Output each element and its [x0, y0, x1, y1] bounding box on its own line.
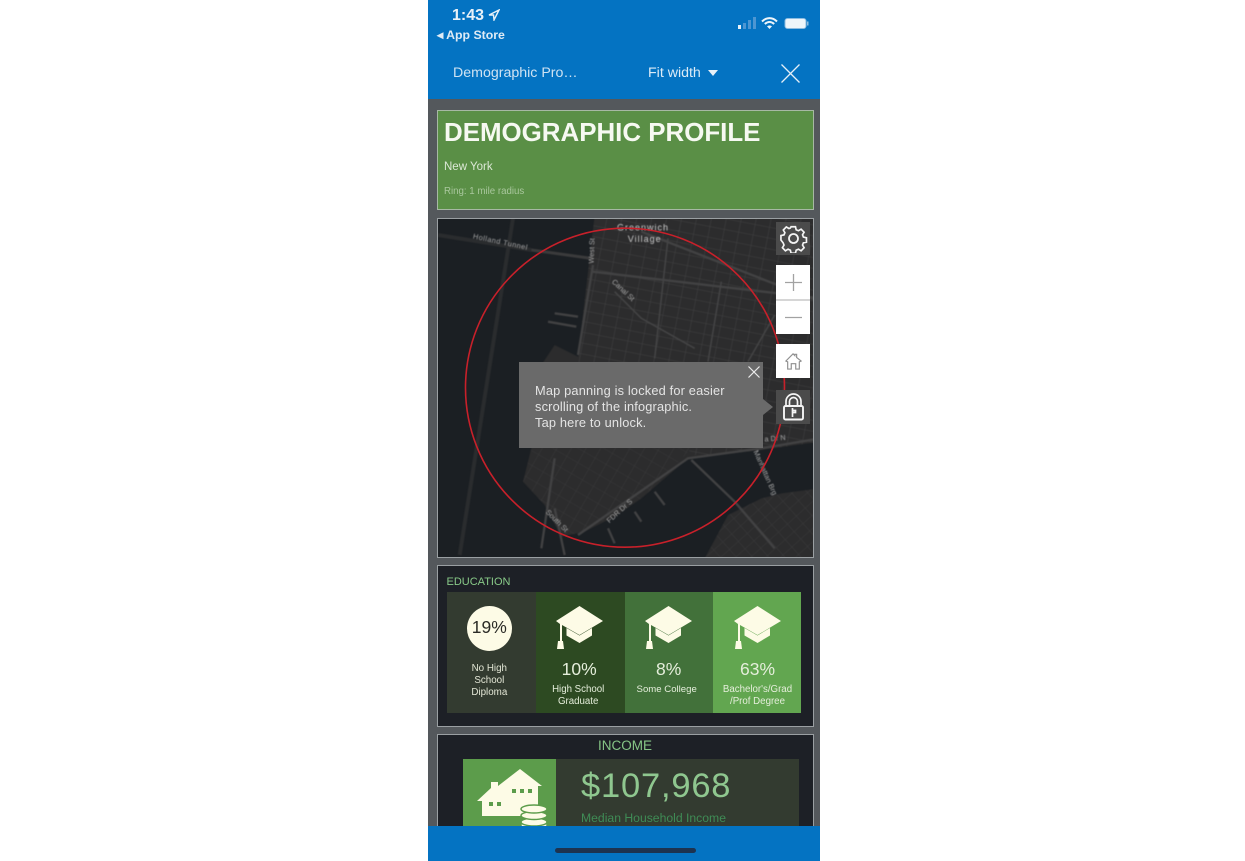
phone screen: [428, 0, 820, 861]
ring: 1 mile radius: [464, 227, 786, 548]
icon: padlock: [783, 393, 804, 420]
icon: plus: [785, 274, 802, 291]
label: Graduate: [558, 696, 598, 707]
back to app store: ◂ App Store: [437, 28, 505, 42]
callout pointer: [763, 399, 773, 415]
icon: graduation cap: [645, 606, 692, 649]
panel: education: [437, 565, 814, 727]
callout text: Tap here to unlock.: [535, 415, 646, 430]
icon: dropdown caret: [708, 70, 718, 76]
education tile: bachelor's: [713, 592, 801, 712]
icon: house and coins: [477, 769, 546, 826]
icon: graduation cap: [734, 606, 781, 649]
callout text: scrolling of the infographic.: [535, 399, 692, 414]
ring radius: Ring: 1 mile radius: [444, 186, 524, 196]
map artwork: Village: [627, 234, 661, 244]
app header bar: [428, 0, 820, 99]
stat: 10%: [562, 658, 597, 678]
panel: title banner: [437, 110, 814, 210]
map artwork: [438, 219, 813, 557]
label: [471, 663, 508, 698]
status time: 1:43: [452, 7, 484, 24]
panel: map: [437, 218, 814, 558]
callout text: Map panning is locked for easier: [535, 383, 725, 398]
label: /Prof Degree: [730, 696, 785, 707]
education heading: EDUCATION: [446, 576, 510, 588]
income heading: INCOME: [598, 738, 652, 752]
income value: $107,968: [581, 767, 731, 805]
stat circle: 19%: [472, 616, 507, 636]
icon: wifi: [761, 17, 778, 29]
label: No High: [472, 663, 507, 674]
map artwork: West St: [586, 237, 596, 263]
income stat tile: [556, 759, 799, 839]
income icon tile: [463, 759, 556, 839]
document title: Demographic Pro…: [453, 65, 578, 81]
button: zoom in and out: [776, 265, 810, 334]
stat circle: [467, 606, 512, 650]
icon: home: [785, 353, 802, 370]
icon: close: [781, 64, 800, 83]
income label: Median Household Income: [581, 811, 726, 825]
education tile: high school: [536, 592, 625, 712]
fit width dropdown: Fit width: [648, 65, 701, 81]
zoom divider: [776, 299, 810, 300]
icon: location arrow: [488, 9, 500, 21]
bottom bar: [428, 826, 820, 861]
heading: DEMOGRAPHIC PROFILE: [444, 119, 760, 147]
label: [723, 684, 792, 707]
button: lock: [776, 390, 810, 424]
location: New York: [444, 161, 493, 173]
label: Some College: [637, 684, 697, 695]
icon: signal bars: [738, 17, 756, 29]
label: High School: [552, 684, 604, 695]
icon: graduation cap: [556, 606, 603, 649]
button: home: [776, 344, 810, 378]
label: Bachelor's/Grad: [723, 684, 792, 695]
education tile: some college: [625, 592, 713, 712]
stat: 63%: [740, 658, 775, 678]
button: settings: [776, 222, 810, 255]
callout text: [535, 383, 725, 430]
panel: income: [437, 734, 814, 844]
icon: battery: [784, 18, 808, 29]
label: [552, 684, 604, 707]
map artwork: Holland Tunnel: [472, 231, 528, 251]
label: School: [474, 675, 504, 686]
callout: panning locked: [519, 362, 763, 448]
label: Diploma: [471, 687, 507, 698]
map artwork: South St: [543, 507, 570, 533]
icon: gear: [780, 226, 808, 253]
map artwork: Canal St: [609, 277, 636, 302]
home indicator: [555, 848, 696, 853]
icon: minus: [785, 316, 802, 318]
map artwork: FDR Dr S: [604, 496, 634, 524]
map artwork: Greenwich: [616, 222, 669, 232]
map artwork: a Dr N: [764, 432, 785, 443]
icon: callout close: [748, 366, 760, 378]
education tile: no diploma: [447, 592, 536, 712]
stat: 8%: [656, 658, 681, 678]
map artwork: Manhattan Brg: [751, 448, 779, 496]
